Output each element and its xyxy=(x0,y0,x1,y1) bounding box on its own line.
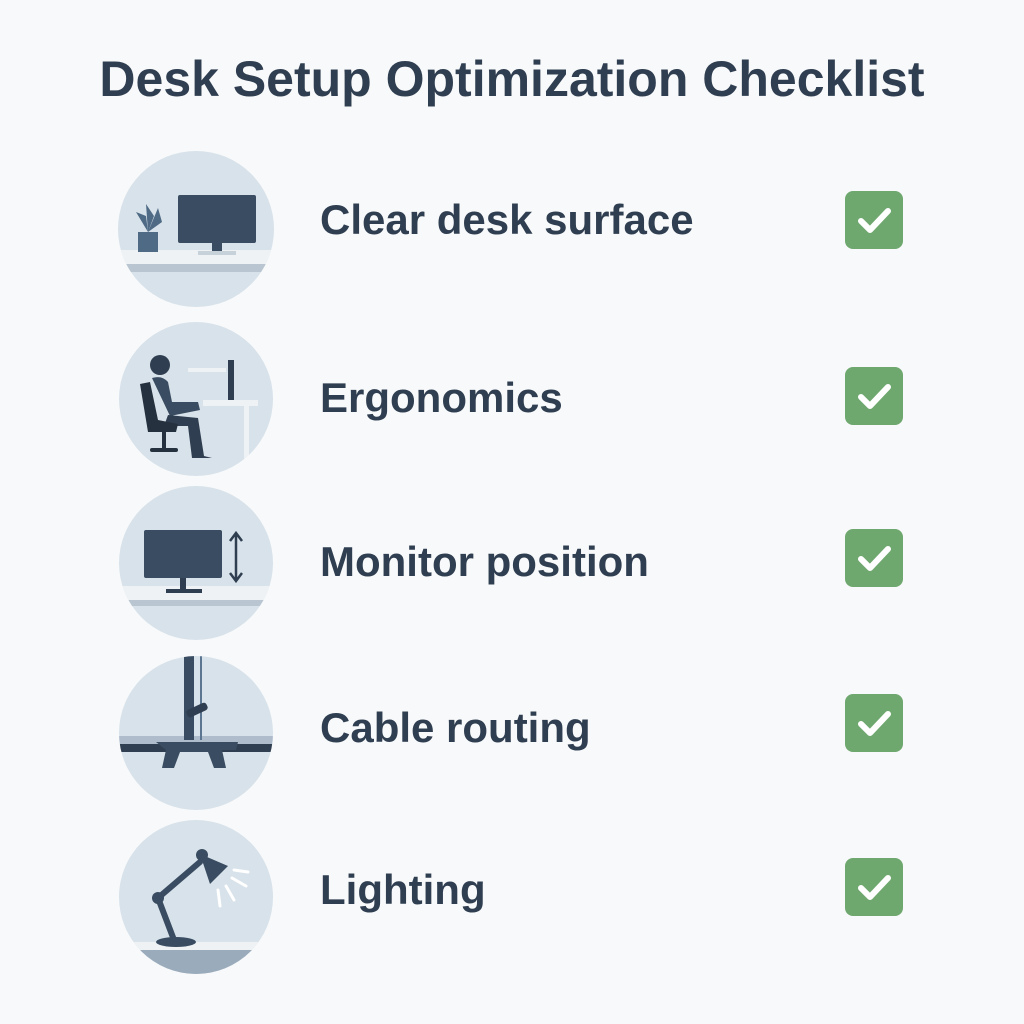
row: cable routing xyxy=(119,656,903,810)
row: clear desk surface xyxy=(118,151,903,307)
icon: desk with monitor and plant xyxy=(118,151,274,307)
label: Ergonomics xyxy=(320,374,563,421)
row: lighting xyxy=(119,820,903,974)
title: Desk Setup Optimization Checklist xyxy=(99,51,925,107)
icon: desk lamp xyxy=(119,820,273,974)
row: ergonomics xyxy=(119,322,903,476)
checkbox xyxy=(845,367,903,425)
label: Cable routing xyxy=(320,704,591,751)
label: Clear desk surface xyxy=(320,196,694,243)
checkbox xyxy=(845,694,903,752)
label: Monitor position xyxy=(320,538,649,585)
checkbox xyxy=(845,191,903,249)
checkbox xyxy=(845,858,903,916)
icon: cable clamp on desk edge xyxy=(119,656,273,810)
icon: person seated at desk xyxy=(119,322,273,476)
label: Lighting xyxy=(320,866,486,913)
row: monitor position xyxy=(119,486,903,640)
checkbox xyxy=(845,529,903,587)
icon: monitor with height arrow xyxy=(119,486,273,640)
